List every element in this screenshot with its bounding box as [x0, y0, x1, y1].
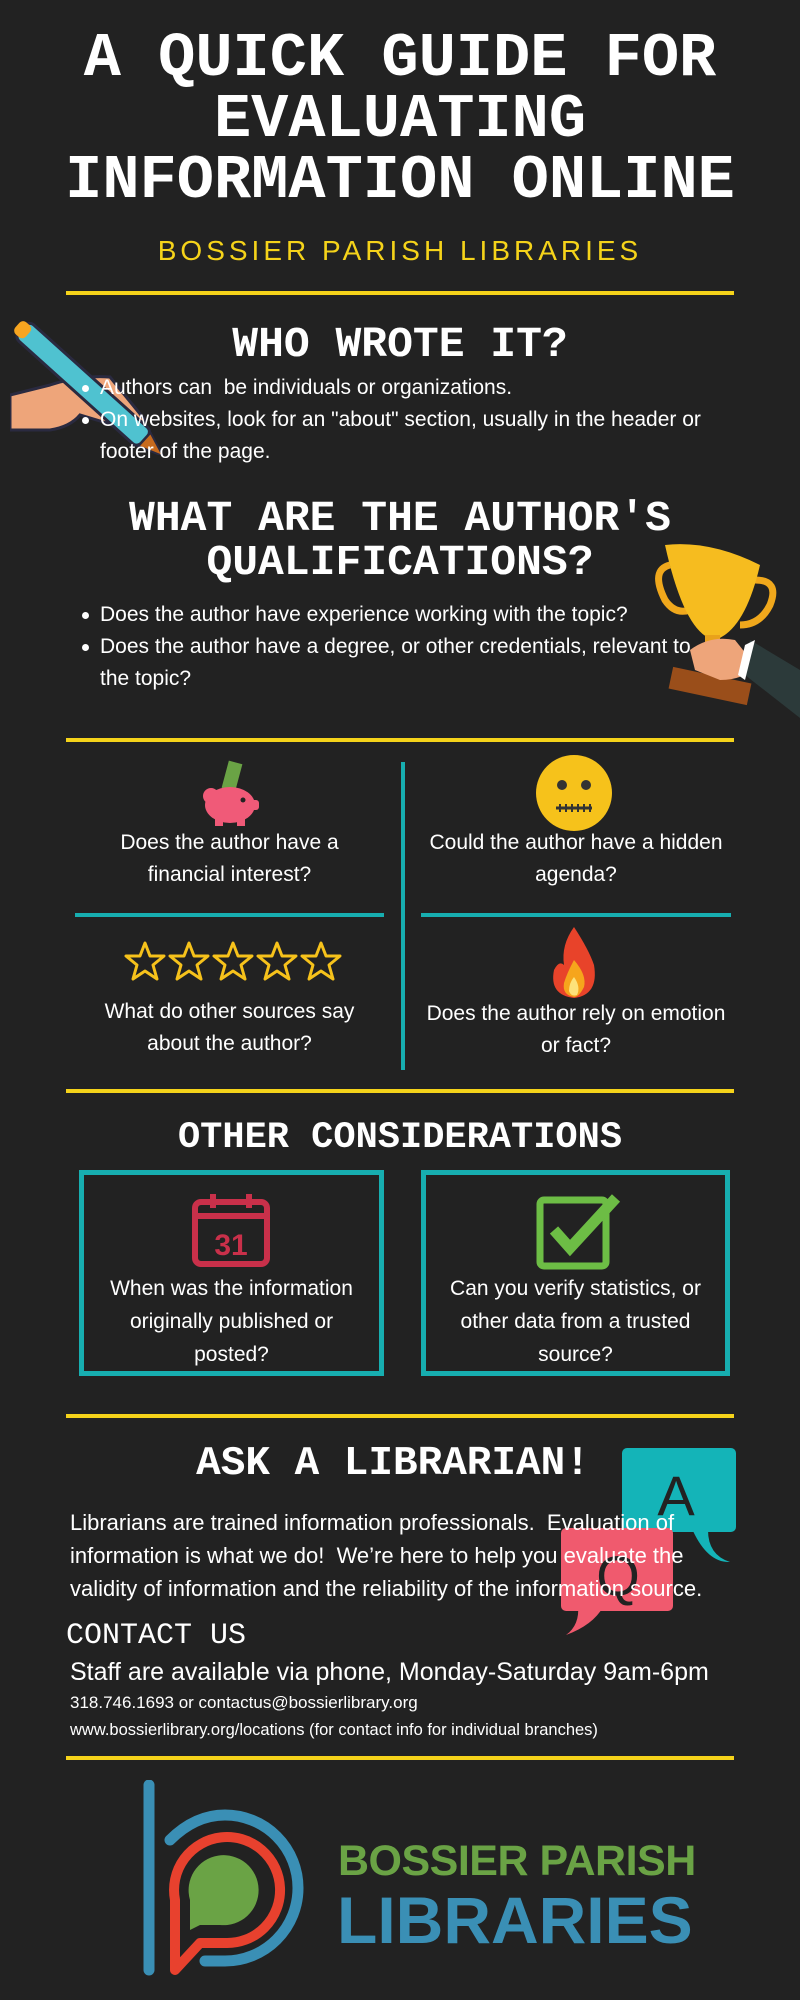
- bullets: who wrote it: Authors can be individuals or organizations.: [100, 376, 512, 399]
- icon: hand with pen: [10, 321, 164, 455]
- title: INFORMATION ONLINE: [65, 145, 735, 216]
- heading: qualifications: WHAT ARE THE AUTHOR'S: [129, 494, 671, 543]
- icon: calendar: [192, 1194, 270, 1267]
- text: publish date: posted?: [194, 1343, 269, 1366]
- text: contact info: www.bossierlibrary.org/locations (for contact info for individual branches): [70, 1721, 598, 1739]
- text: publish date: [110, 1277, 353, 1366]
- text: emotion or fact: [427, 1002, 725, 1057]
- text: other sources: What do other sources say: [105, 1000, 354, 1023]
- text: financial interest: Does the author have a: [120, 831, 339, 854]
- text: hidden agenda: [429, 831, 723, 886]
- text: financial interest: financial interest?: [148, 863, 311, 886]
- text: hidden agenda: agenda?: [535, 863, 617, 886]
- title: [65, 23, 735, 216]
- icon: Q&A speech bubbles: Q: [596, 1544, 640, 1607]
- icon: trophy in hand: [655, 544, 800, 718]
- icon: check box: [536, 1194, 620, 1270]
- icon: stars: [124, 942, 342, 981]
- text: publish date: originally published or: [130, 1310, 333, 1333]
- bullets: qualifications: Does the author have experience working with the topic?: [100, 603, 628, 626]
- heading: qualifications: [129, 494, 671, 587]
- icon: piggy bank: [203, 760, 259, 826]
- logo mark: [144, 1780, 304, 1976]
- text: financial interest: [120, 831, 339, 886]
- text: librarian paragraph: information is what we do! We’re here to help you evaluate the: [70, 1543, 684, 1568]
- icon: zipper face: [536, 755, 612, 831]
- heading: qualifications: QUALIFICATIONS?: [206, 538, 594, 587]
- text: contact info: Staff are available via phone, Monday-Saturday 9am-6pm: [70, 1658, 709, 1686]
- text: verify: source?: [538, 1343, 613, 1366]
- text: emotion or fact: Does the author rely on emotion: [427, 1002, 725, 1025]
- title: EVALUATING: [214, 84, 586, 155]
- heading: ask a librarian: ASK A LIBRARIAN!: [196, 1441, 590, 1487]
- text: verify: other data from a trusted: [461, 1310, 690, 1333]
- logo text: BOSSIER PARISH: [338, 1837, 696, 1885]
- text: verify: [450, 1277, 701, 1366]
- text: contact info: [70, 1658, 709, 1739]
- text: librarian paragraph: Librarians are trained information professionals. Evaluation of: [70, 1510, 674, 1535]
- text: librarian paragraph: [70, 1510, 702, 1601]
- bullets: who wrote it: footer of the page.: [100, 440, 270, 463]
- text: publish date: When was the information: [110, 1277, 353, 1300]
- bullets: who wrote it: [82, 376, 701, 463]
- heading: who wrote it: WHO WROTE IT?: [232, 320, 568, 369]
- text: other sources: about the author?: [147, 1032, 312, 1055]
- logo: Bossier Parish Libraries: [144, 1780, 696, 1976]
- icon: calendar: 31: [214, 1229, 248, 1262]
- panel: publish date: [79, 1170, 384, 1376]
- title: A QUICK GUIDE FOR: [84, 23, 716, 94]
- heading: other considerations: OTHER CONSIDERATIONS: [178, 1117, 622, 1159]
- text: librarian paragraph: validity of information and the reliability of the information source.: [70, 1576, 702, 1601]
- text: verify: Can you verify statistics, or: [450, 1277, 701, 1300]
- logo: Bossier Parish Libraries: LIBRARIES: [337, 1883, 693, 1957]
- subtitle: BOSSIER PARISH LIBRARIES: [158, 235, 642, 266]
- icon: Q&A speech bubbles: [561, 1448, 736, 1635]
- bullets: qualifications: the topic?: [100, 667, 191, 690]
- icon: Q&A speech bubbles: A: [657, 1464, 695, 1527]
- bullets: who wrote it: On websites, look for an "about" section, usually in the header or: [100, 408, 701, 431]
- panel: verify: [421, 1170, 730, 1376]
- text: hidden agenda: Could the author have a hidden: [429, 831, 723, 854]
- bullets: qualifications: Does the author have a degree, or other credentials, relevant to: [100, 635, 691, 658]
- heading: contact us: CONTACT US: [66, 1619, 246, 1653]
- text: contact info: 318.746.1693 or contactus@bossierlibrary.org: [70, 1693, 418, 1712]
- text: other sources: [104, 1000, 354, 1055]
- panel: question grid: [75, 755, 731, 1070]
- icon: fire: [553, 927, 595, 998]
- text: emotion or fact: or fact?: [541, 1034, 611, 1057]
- bullets: qualifications: [82, 603, 691, 690]
